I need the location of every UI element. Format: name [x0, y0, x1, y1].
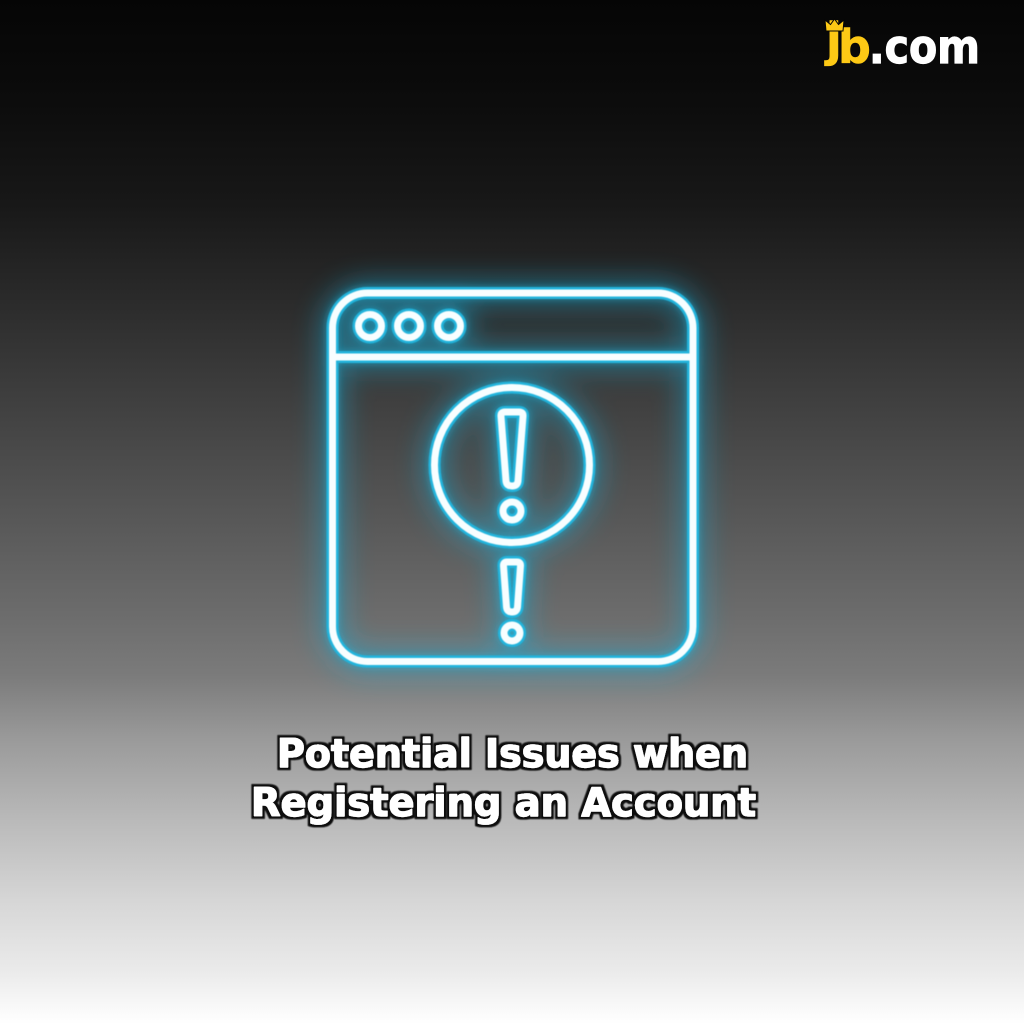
wide cyan halo	[332, 293, 693, 662]
icon: neon browser window with warning marks	[332, 293, 693, 662]
title line 1: Potential Issues when	[277, 732, 748, 777]
white tube core	[332, 293, 693, 662]
title	[251, 732, 756, 826]
cyan tube edge	[332, 293, 693, 662]
near cyan glow	[332, 293, 693, 662]
logo: jb.com	[824, 13, 980, 74]
icon: logo crown	[825, 19, 844, 31]
logo letter j: j	[824, 13, 842, 67]
logo letter b: b	[838, 20, 871, 74]
title line 2: Registering an Account	[251, 781, 756, 826]
logo domain suffix: .com	[869, 20, 980, 74]
